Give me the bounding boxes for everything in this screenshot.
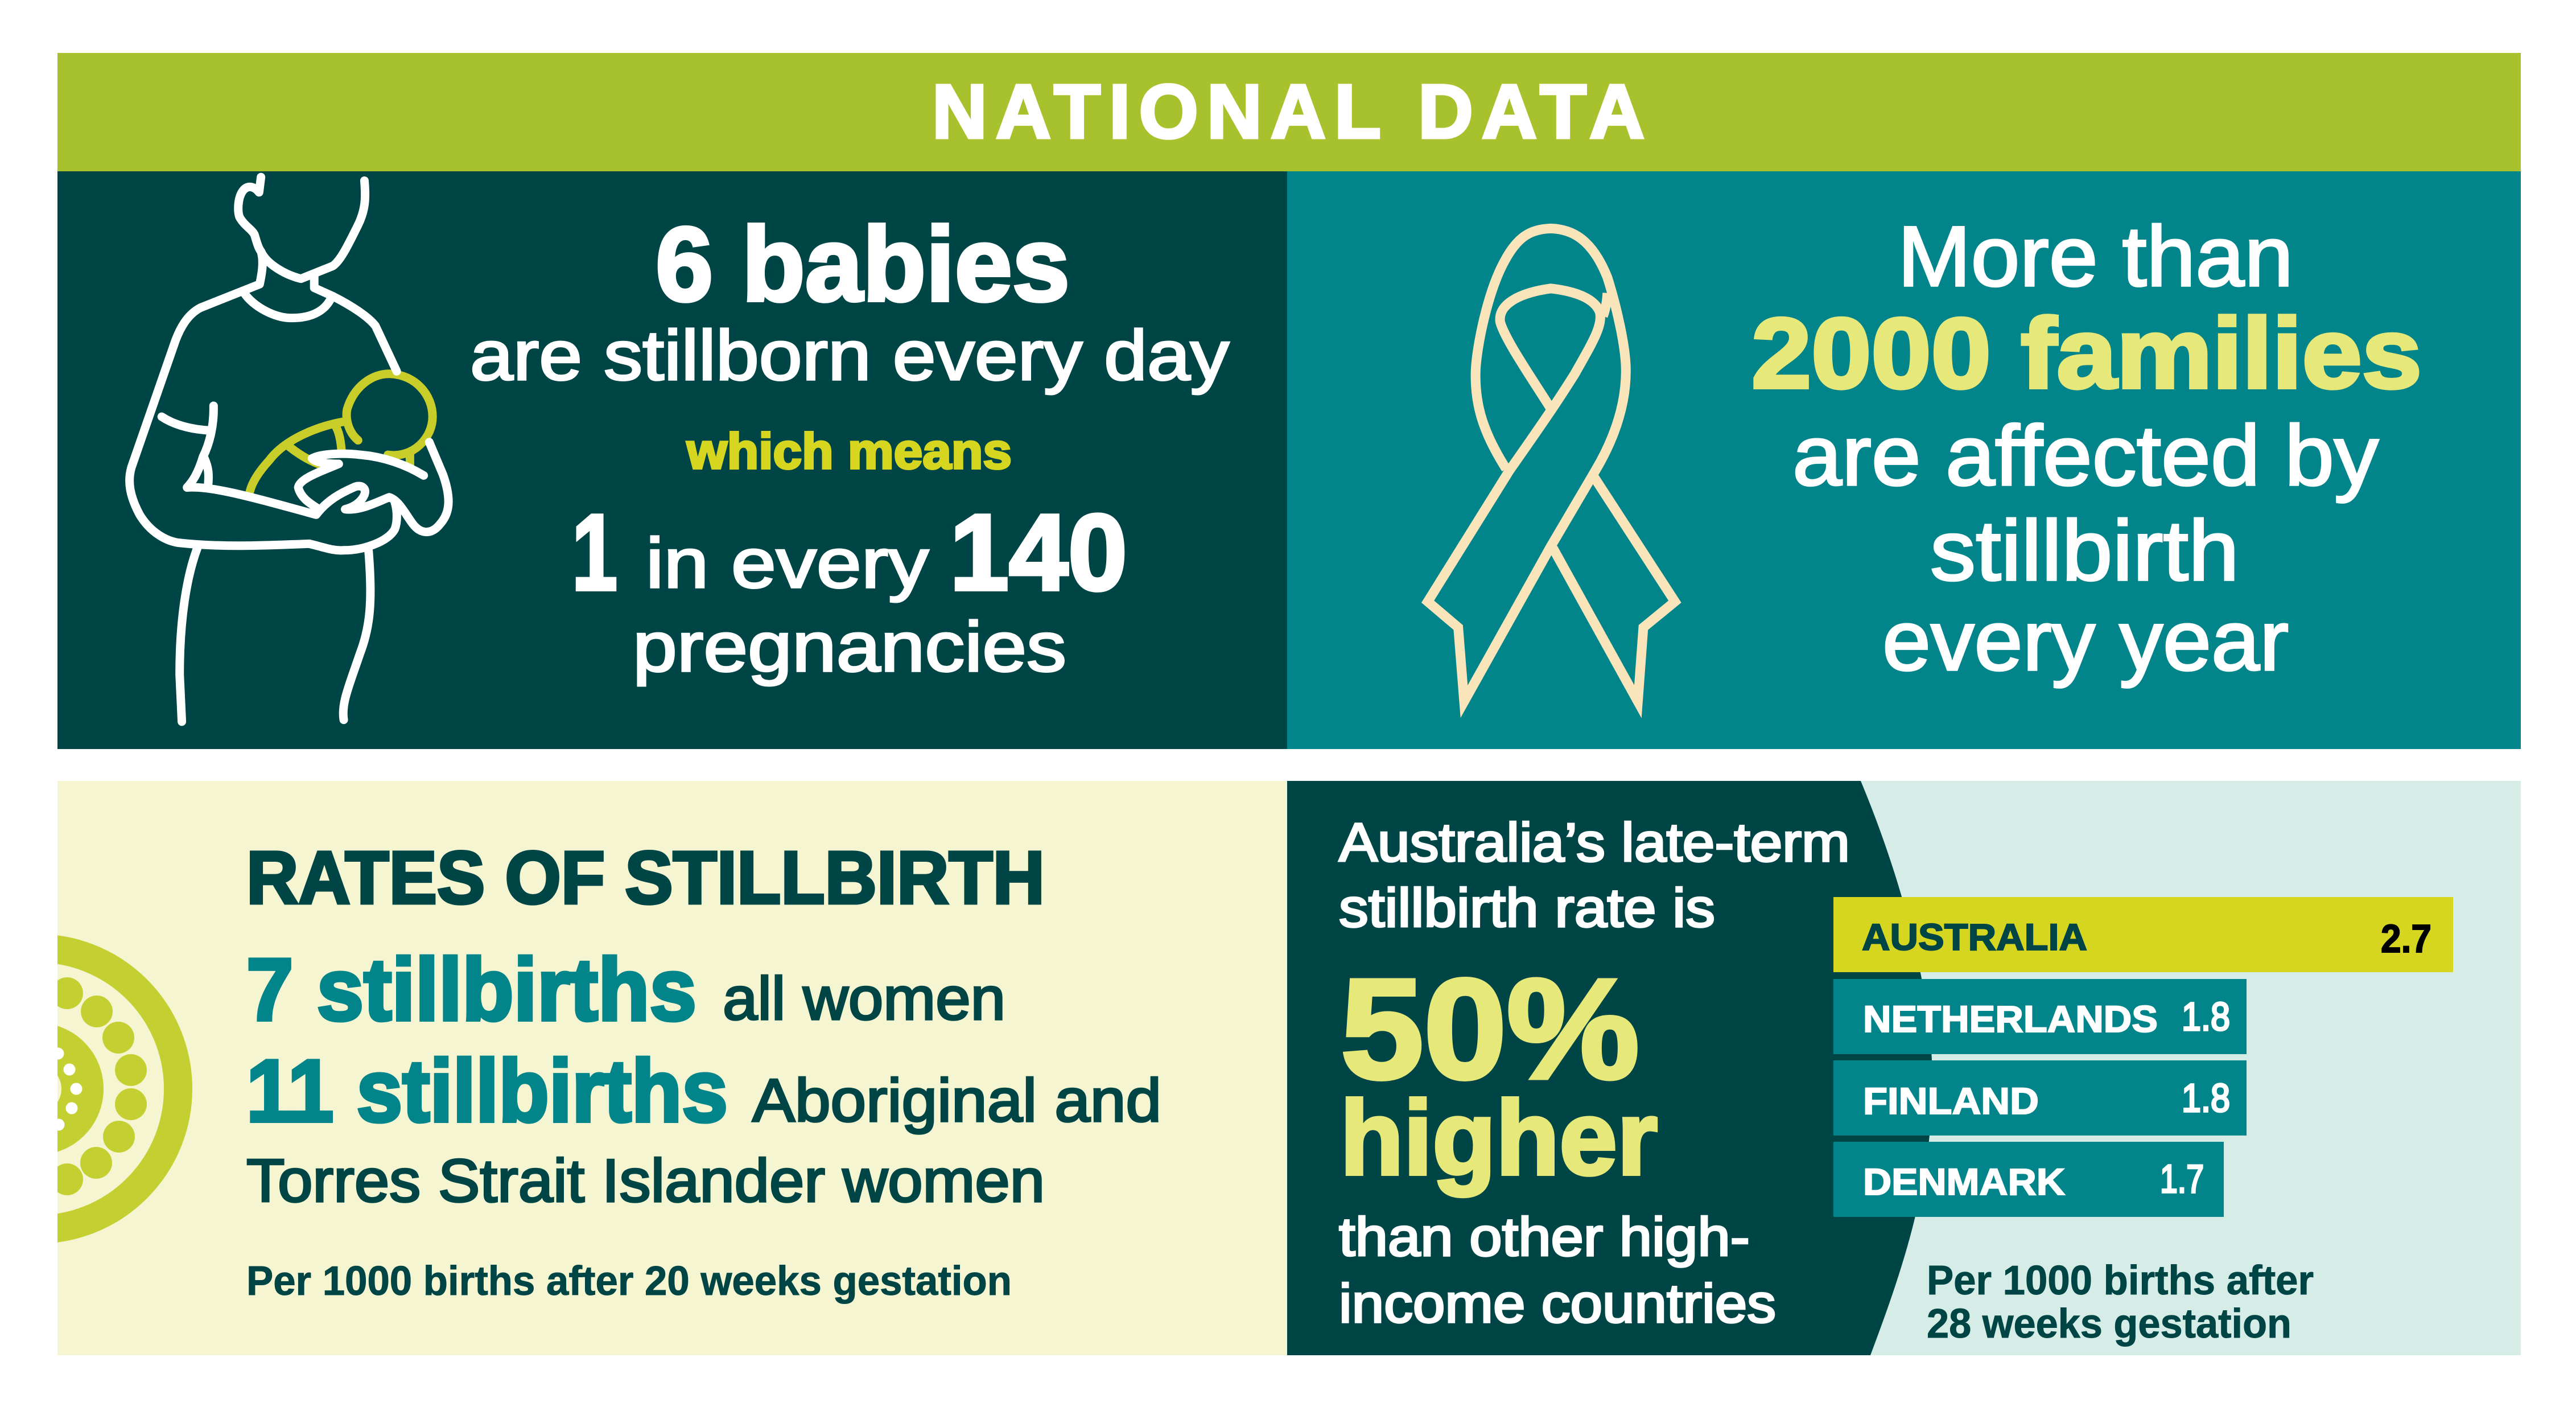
text: 1 in every 140: 140 — [950, 492, 1127, 613]
text: pregnancies: pregnancies — [633, 608, 1066, 686]
icon: dot circle motif — [57, 935, 192, 1243]
text: 6 babies: 6 babies — [656, 206, 1070, 323]
panel: families affected — [1287, 171, 2521, 749]
icon: awareness ribbon — [1428, 228, 1675, 702]
dark curved callout: than other high- — [1339, 1207, 1750, 1268]
stat: 11 stillbirths Aboriginal and Torres Strait Islander women: Aboriginal and — [752, 1066, 1161, 1134]
stat: 7 stillbirths all women — [246, 940, 1005, 1039]
heading: rates of stillbirth: RATES OF STILLBIRTH — [246, 836, 1045, 919]
text: 1 in every 140: in every — [646, 524, 929, 603]
bar: Netherlands — [1833, 979, 2247, 1054]
text: 1 in every 140: 1 — [572, 492, 617, 613]
stat: 7 stillbirths all women: 7 stillbirths — [246, 940, 696, 1039]
text: 2000 families: 2000 families — [1751, 298, 2422, 409]
bar: Finland — [1833, 1060, 2247, 1136]
bar: Denmark — [1833, 1142, 2224, 1217]
panel: late-term comparison — [1287, 781, 2521, 1355]
note: per 1000 births after 20 weeks: Per 1000 births after 20 weeks gestation — [246, 1258, 1012, 1304]
bar: Denmark: DENMARK — [1863, 1161, 2065, 1203]
bar: Netherlands: NETHERLANDS — [1863, 998, 2158, 1040]
bar: Australia: 2.7 — [2381, 916, 2431, 961]
text: which means: which means — [686, 423, 1012, 479]
text: every year: every year — [1882, 593, 2289, 688]
note: per 1000 births after 28 weeks: 28 weeks gestation — [1927, 1301, 2291, 1347]
header banner — [57, 53, 2521, 171]
stat: 11 stillbirths Aboriginal and Torres Strait Islander women: Torres Strait Islander women — [246, 1146, 1045, 1215]
text: 1 in every 140 — [572, 492, 1127, 613]
bar: Australia — [1833, 897, 2453, 972]
dark curved callout: higher — [1340, 1080, 1658, 1197]
note: per 1000 births after 28 weeks — [1927, 1258, 2314, 1347]
stat: 7 stillbirths all women: all women — [723, 964, 1005, 1032]
dark curved callout: Australia’s late-term — [1339, 812, 1850, 873]
text: are affected by: are affected by — [1792, 408, 2379, 503]
note: per 1000 births after 28 weeks: Per 1000 births after — [1927, 1258, 2314, 1303]
text: stillbirth: stillbirth — [1930, 503, 2239, 598]
dark curved callout: income countries — [1339, 1273, 1776, 1334]
stat: 11 stillbirths Aboriginal and Torres Strait Islander women — [246, 1042, 1161, 1215]
text: are stillborn every day: are stillborn every day — [470, 316, 1229, 395]
bar: Finland: 1.8 — [2182, 1076, 2230, 1120]
bar: Netherlands: 1.8 — [2182, 994, 2230, 1039]
bar: Finland: FINLAND — [1863, 1080, 2039, 1122]
bar: Denmark: 1.7 — [2160, 1157, 2204, 1201]
text: more than: More than — [1898, 208, 2293, 304]
panel: babies stillborn — [57, 171, 1288, 749]
icon: parent holding baby — [130, 177, 448, 722]
panel: rates of stillbirth — [0, 781, 1287, 1355]
dark curved callout — [1287, 781, 1932, 1355]
dark curved callout: 50% — [1341, 949, 1639, 1108]
bar: Australia: AUSTRALIA — [1862, 916, 2087, 958]
bar chart — [1833, 897, 2453, 1217]
header banner: NATIONAL DATA — [932, 69, 1644, 154]
dark curved callout: stillbirth rate is — [1339, 878, 1715, 939]
stat: 11 stillbirths Aboriginal and Torres Strait Islander women: 11 stillbirths — [246, 1042, 728, 1140]
